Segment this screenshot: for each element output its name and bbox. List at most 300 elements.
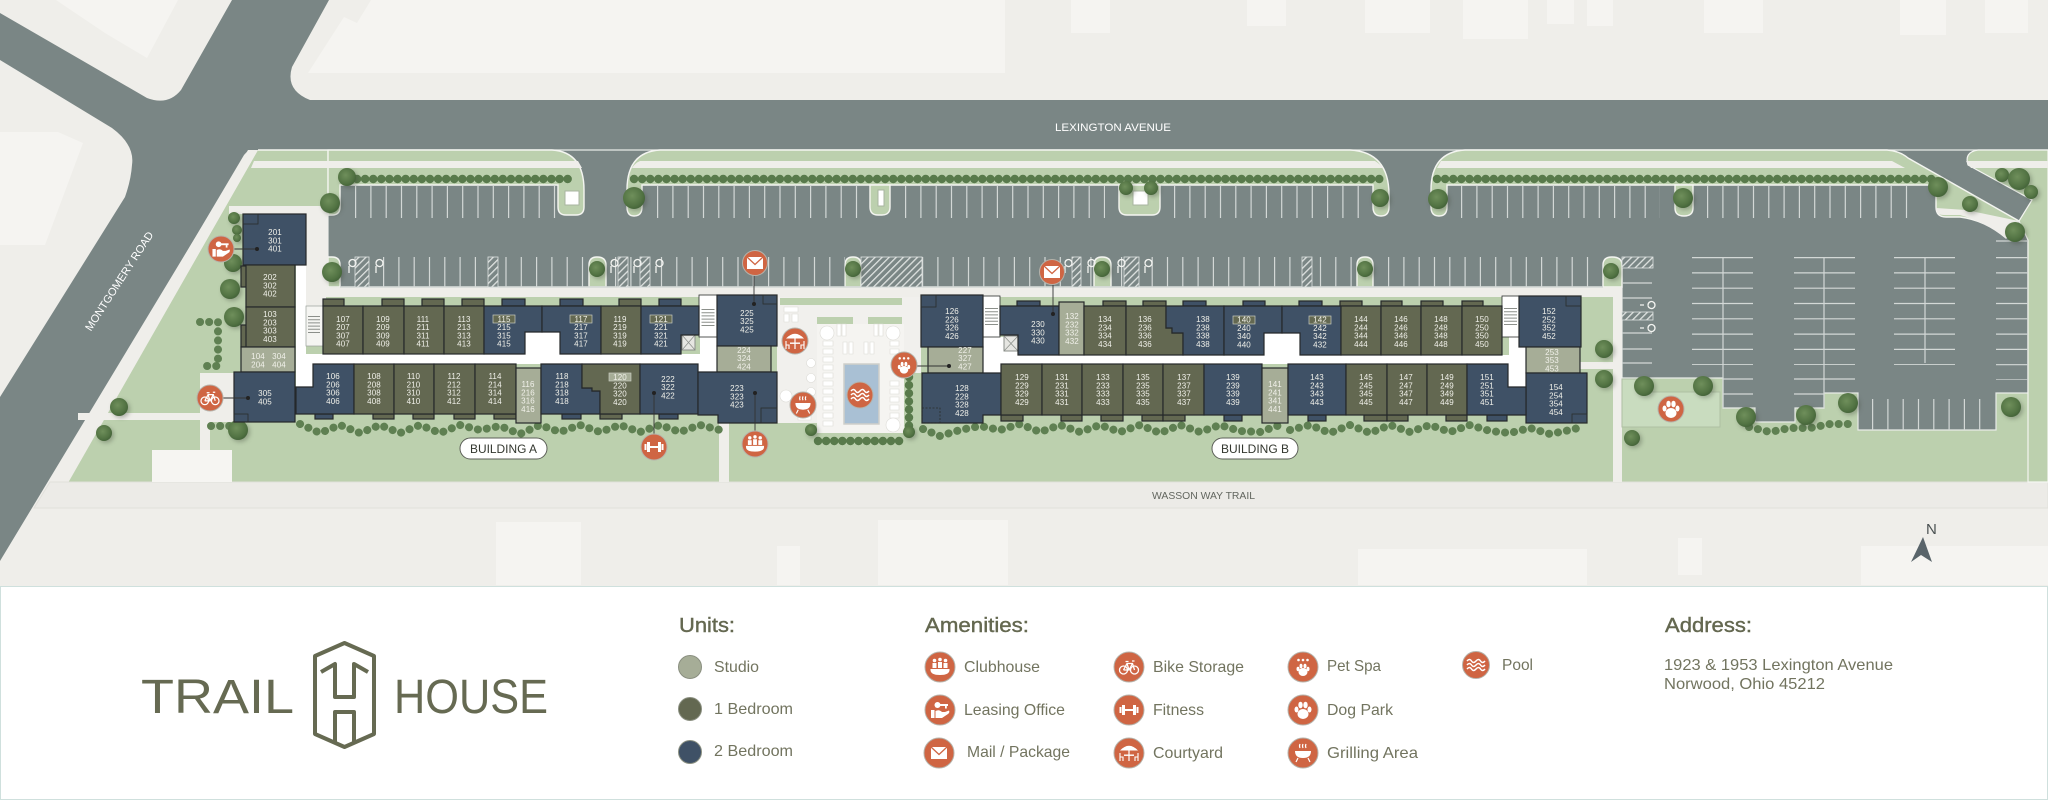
unit 253: 353 (1545, 356, 1559, 365)
unit 115: 115 (497, 315, 511, 324)
unit 138: 338 (1196, 332, 1210, 341)
unit 224: 324 (737, 354, 751, 363)
unit 201: 401 (268, 245, 282, 254)
unit 115: 415 (497, 340, 511, 349)
unit 139: 139 (1226, 373, 1240, 382)
unit 116: 316 (521, 397, 535, 406)
dog park lawn (1622, 379, 1720, 427)
unit 227: 227 (958, 346, 972, 355)
unit 107: 307 (336, 331, 350, 340)
building A (234, 214, 777, 423)
unit 146: 246 (1394, 323, 1408, 332)
address: Norwood, Ohio 45212 (1664, 676, 1825, 693)
unit 112: 312 (447, 389, 461, 398)
unit 115 (484, 299, 542, 354)
units legend (678, 615, 793, 764)
unit 230: 230 (1031, 320, 1045, 329)
loungers (780, 307, 900, 432)
unit 139 (1204, 364, 1262, 421)
unit 142: 432 (1313, 340, 1327, 349)
unit 137: 437 (1177, 398, 1191, 407)
unit 107: 107 (336, 315, 350, 324)
unit 135: 335 (1136, 390, 1150, 399)
unit 103: 403 (263, 335, 277, 344)
pool: Pool (1502, 657, 1533, 674)
unit 111 (404, 299, 444, 354)
unit 148 (1421, 301, 1462, 355)
unit 114: 114 (488, 372, 502, 381)
unit 149: 249 (1440, 381, 1454, 390)
address (1664, 615, 1893, 693)
unit 131 (1042, 364, 1082, 421)
unit 140: 240 (1237, 324, 1251, 333)
unit 132 (1059, 302, 1084, 355)
unit 135: 135 (1136, 373, 1150, 382)
unit 227: 427 (958, 362, 972, 371)
unit 109: 109 (376, 315, 390, 324)
unit 143: 143 (1310, 373, 1324, 382)
unit 136: 436 (1138, 340, 1152, 349)
unit 106: 106 (326, 372, 340, 381)
logo (141, 643, 548, 747)
unit 148: 348 (1434, 332, 1448, 341)
unit 129: 129 (1015, 373, 1029, 382)
unit 140: 440 (1237, 340, 1251, 349)
unit 114: 314 (488, 389, 502, 398)
unit 103: 303 (263, 327, 277, 336)
unit 128: 428 (955, 409, 969, 418)
unit 201: 201 (268, 228, 282, 237)
unit 202 (241, 265, 295, 307)
unit 135: 435 (1136, 398, 1150, 407)
unit 137: 237 (1177, 381, 1191, 390)
unit 129: 329 (1015, 390, 1029, 399)
unit 151: 351 (1480, 390, 1494, 399)
legend panel (0, 586, 2048, 800)
unit 107: 407 (336, 340, 350, 349)
label: Lexington Avenue: LEXINGTON AVENUE (1055, 122, 1171, 134)
unit 143: 243 (1310, 381, 1324, 390)
unit 129: 429 (1015, 398, 1029, 407)
label: Building B (1212, 438, 1298, 459)
unit 131: 431 (1055, 398, 1069, 407)
unit 121 (641, 299, 699, 354)
unit 116: 216 (521, 388, 535, 397)
unit 119 (601, 299, 641, 354)
unit 143: 343 (1310, 390, 1324, 399)
unit 119: 319 (613, 331, 627, 340)
unit 108 (354, 364, 394, 419)
unit 111: 111 (417, 315, 429, 324)
unit 253: 253 (1545, 348, 1559, 357)
unit 134: 134 (1098, 315, 1112, 324)
unit 145: 145 (1359, 373, 1373, 382)
unit 133: 333 (1096, 390, 1110, 399)
map icon: bike storage (197, 385, 250, 411)
mail and package (924, 738, 1070, 768)
unit 104: 204 (251, 360, 265, 369)
unit 114: 414 (488, 397, 502, 406)
roads (0, 0, 2048, 561)
unit 223: 323 (730, 392, 744, 401)
unit 139: 239 (1226, 381, 1240, 390)
unit 121: 121 (654, 315, 668, 324)
unit 119: 119 (613, 315, 627, 324)
unit 142 (1282, 301, 1341, 355)
unit 121: 321 (654, 331, 668, 340)
unit 133 (1082, 364, 1123, 421)
unit 202: 302 (263, 281, 277, 290)
unit 150: 150 (1475, 315, 1489, 324)
unit 225 (717, 295, 777, 346)
unit 106 (296, 364, 354, 419)
unit 253 (1526, 347, 1580, 373)
pet spa: Pet Spa (1327, 658, 1381, 675)
unit 118: 118 (555, 372, 569, 381)
map icon: pool (847, 382, 873, 408)
trees (96, 168, 2038, 446)
unit 110: 410 (407, 397, 421, 406)
address: Address: (1665, 615, 1752, 637)
grilling area (1288, 738, 1418, 768)
unit 222: 222 (661, 375, 675, 384)
unit 151: 251 (1480, 381, 1494, 390)
unit 106: 306 (326, 389, 340, 398)
bike storage (1114, 652, 1244, 682)
unit 134: 434 (1098, 340, 1112, 349)
unit 113: 413 (457, 340, 471, 349)
unit 144 (1340, 301, 1381, 355)
unit 227: 327 (958, 354, 972, 363)
unit 230: 330 (1031, 328, 1045, 337)
unit 117: 217 (574, 323, 588, 332)
map icon: courtyard (782, 328, 808, 354)
unit 111: 311 (416, 331, 430, 340)
unit 144: 444 (1354, 340, 1368, 349)
unit 142: 242 (1313, 324, 1327, 333)
corridors and stairs B (983, 296, 1526, 387)
map icon: leasing office (208, 236, 259, 262)
unit 126: 426 (945, 332, 959, 341)
unit 201: 301 (268, 236, 282, 245)
unit 115: 315 (497, 331, 511, 340)
unit 150: 350 (1475, 332, 1489, 341)
unit 113: 113 (457, 315, 471, 324)
map icon: fitness (641, 391, 667, 460)
label: Montgomery Road: MONTGOMERY ROAD (83, 230, 156, 333)
unit 154: 354 (1549, 400, 1563, 409)
unit 107 (323, 299, 363, 354)
unit 112: 412 (447, 397, 461, 406)
unit 129: 229 (1015, 381, 1029, 390)
unit 117: 317 (574, 331, 588, 340)
unit 109: 209 (376, 323, 390, 332)
unit 108: 208 (367, 380, 381, 389)
amenities legend: Amenities: (925, 615, 1029, 637)
unit 109: 309 (376, 331, 390, 340)
map background (0, 0, 2048, 586)
unit 223: 223 (730, 384, 744, 393)
unit 108: 308 (367, 389, 381, 398)
unit 103: 103 (263, 310, 277, 319)
unit 113 (444, 299, 484, 354)
unit 144: 244 (1354, 323, 1368, 332)
unit 151: 151 (1480, 373, 1494, 382)
unit 253: 453 (1545, 364, 1559, 373)
map icon: clubhouse (742, 391, 768, 457)
unit 126 (921, 295, 983, 347)
unit 145 (1346, 364, 1387, 421)
unit 135: 235 (1136, 381, 1150, 390)
site lawn (68, 150, 2048, 482)
mail and package: Mail / Package (967, 744, 1070, 761)
unit 154: 254 (1549, 391, 1563, 400)
unit 222: 422 (661, 391, 675, 400)
unit 148: 248 (1434, 323, 1448, 332)
unit 121: 221 (654, 323, 668, 332)
parking lot asphalt (328, 150, 2048, 430)
unit 113: 313 (457, 331, 471, 340)
unit 201 (243, 214, 306, 265)
unit 118: 218 (555, 380, 569, 389)
unit 141: 241 (1268, 388, 1282, 397)
map icon: pet spa (891, 352, 951, 378)
unit 202: 402 (263, 290, 277, 299)
unit 149: 449 (1440, 398, 1454, 407)
unit 136: 336 (1138, 332, 1152, 341)
unit 137 (1163, 364, 1204, 421)
clubhouse: Clubhouse (964, 659, 1040, 676)
unit 121: 421 (654, 340, 668, 349)
unit 132: 232 (1065, 320, 1079, 329)
unit 136: 136 (1138, 315, 1152, 324)
unit 147: 447 (1399, 398, 1413, 407)
unit 139: 339 (1226, 390, 1240, 399)
fitness (1114, 695, 1204, 725)
label: Building B: BUILDING B (1221, 442, 1289, 456)
side paths (78, 362, 1613, 482)
map icon: mail B (1040, 260, 1064, 316)
unit 152: 352 (1542, 324, 1556, 333)
unit 120: 420 (613, 398, 627, 407)
accessible stall marks (349, 260, 1655, 332)
unit 149 (1427, 364, 1467, 421)
unit 114: 214 (488, 380, 502, 389)
unit 128: 128 (955, 384, 969, 393)
unit 114 (475, 364, 516, 419)
address: 1923 & 1953 Lexington Avenue (1664, 657, 1893, 674)
unit 126: 326 (945, 324, 959, 333)
unit 142: 342 (1313, 332, 1327, 341)
unit 146: 346 (1394, 332, 1408, 341)
unit 134 (1084, 301, 1126, 355)
dog park: Dog Park (1327, 702, 1394, 719)
unit 144: 344 (1354, 332, 1368, 341)
unit 103 (241, 307, 295, 347)
unit 305: 305 (258, 389, 272, 398)
unit 305: 405 (258, 398, 272, 406)
units legend: 1 Bedroom (714, 701, 793, 718)
unit 118 (541, 364, 600, 419)
unit 152 (1519, 296, 1581, 347)
islands (251, 150, 2048, 482)
unit 134: 234 (1098, 323, 1112, 332)
unit 154: 154 (1549, 383, 1563, 392)
unit 140: 340 (1237, 332, 1251, 341)
unit 138: 238 (1196, 323, 1210, 332)
unit 144: 144 (1354, 315, 1368, 324)
unit 136 (1126, 301, 1183, 355)
unit 106: 406 (326, 397, 340, 406)
unit 148: 148 (1434, 315, 1448, 324)
courtyard: Courtyard (1153, 745, 1223, 762)
unit 152: 152 (1542, 307, 1556, 316)
unit 117: 417 (574, 340, 588, 349)
unit 133: 233 (1096, 381, 1110, 390)
unit 131: 231 (1055, 381, 1069, 390)
unit 132: 332 (1065, 329, 1079, 338)
unit 117: 117 (574, 315, 588, 324)
unit 147: 347 (1399, 390, 1413, 399)
unit 152: 252 (1542, 315, 1556, 324)
unit 132: 132 (1065, 312, 1079, 321)
clubhouse (925, 652, 1040, 682)
unit 222: 322 (661, 383, 675, 392)
unit 225: 425 (740, 325, 754, 334)
unit 107: 207 (336, 323, 350, 332)
logo: TRAIL (141, 671, 294, 724)
unit 141 (1262, 368, 1288, 423)
pet spa (1288, 652, 1381, 682)
unit 137: 137 (1177, 373, 1191, 382)
leasing office: Leasing Office (964, 702, 1065, 719)
unit 111: 411 (416, 340, 430, 349)
courtyard and pool (777, 297, 921, 433)
unit 112: 212 (447, 380, 461, 389)
unit 150: 250 (1475, 323, 1489, 332)
pool (1462, 652, 1533, 678)
unit 140: 140 (1237, 316, 1251, 324)
unit 154 (1526, 373, 1587, 423)
unit 224: 224 (737, 346, 751, 355)
unit 225: 225 (740, 309, 754, 318)
label: Building A: BUILDING A (470, 442, 537, 456)
map icon: dog park (1658, 396, 1684, 422)
unit 106: 206 (326, 380, 340, 389)
unit 103: 203 (263, 318, 277, 327)
pool water (844, 364, 879, 424)
unit 145: 245 (1359, 381, 1373, 390)
logo: HOUSE (394, 671, 548, 724)
label: Building A (460, 438, 547, 459)
unit 146: 446 (1394, 340, 1408, 349)
unit 119: 219 (613, 323, 627, 332)
unit 133: 133 (1096, 373, 1110, 382)
unit 147 (1387, 364, 1427, 421)
unit 119: 419 (613, 340, 627, 349)
unit 227 (928, 346, 983, 373)
building B (921, 295, 1587, 423)
units legend: Studio (714, 659, 759, 676)
courtyard (1114, 738, 1223, 768)
bike storage: Bike Storage (1153, 659, 1244, 676)
unit 230 (1000, 301, 1059, 355)
corridors and stairs A (296, 265, 717, 387)
unit 126: 226 (945, 315, 959, 324)
fitness: Fitness (1153, 702, 1204, 719)
unit 120: 220 (613, 381, 627, 390)
parking stall lines (340, 202, 2028, 414)
unit 132: 432 (1065, 337, 1079, 346)
unit 136: 236 (1138, 323, 1152, 332)
unit 128: 328 (955, 401, 969, 410)
unit 138: 438 (1196, 340, 1210, 349)
units legend: 2 Bedroom (714, 743, 793, 760)
unit 140 (1224, 301, 1282, 355)
map icon: grilling area (790, 392, 816, 418)
unit 118: 418 (555, 397, 569, 406)
unit 120: 120 (613, 373, 627, 382)
unit 118: 318 (555, 389, 569, 398)
unit 120 (582, 364, 640, 419)
unit 147: 247 (1399, 381, 1413, 390)
unit 149: 349 (1440, 390, 1454, 399)
sidewalks (229, 206, 1622, 482)
unit 141: 341 (1268, 397, 1282, 406)
unit 224 (717, 346, 771, 372)
unit 104: 304 (272, 352, 286, 361)
perimeter sidewalk (50, 150, 258, 483)
unit 116 (516, 368, 541, 423)
unit 141: 141 (1268, 380, 1282, 389)
unit 128: 228 (955, 392, 969, 401)
unit 104 (241, 347, 295, 372)
unit 110: 210 (407, 380, 421, 389)
unit 149: 149 (1440, 373, 1454, 382)
label: Wasson Way Trail: WASSON WAY TRAIL (1152, 490, 1255, 502)
unit 110: 310 (407, 389, 421, 398)
unit 131: 331 (1055, 390, 1069, 399)
unit 143 (1288, 364, 1346, 421)
units legend: Units: (679, 615, 735, 637)
unit 135 (1123, 364, 1163, 421)
unit 111: 211 (416, 323, 430, 332)
unit 224: 424 (737, 362, 751, 371)
unit 110: 110 (407, 372, 420, 381)
unit 138: 138 (1196, 315, 1210, 324)
unit 108: 408 (367, 397, 381, 406)
leasing office (925, 695, 1065, 725)
unit 142: 142 (1313, 316, 1327, 324)
dog park (1288, 695, 1394, 725)
unit 150: 450 (1475, 340, 1489, 349)
unit 202: 202 (263, 273, 277, 282)
unit 143: 443 (1310, 398, 1324, 407)
unit 225: 325 (740, 317, 754, 326)
unit 145: 445 (1359, 398, 1373, 407)
unit 147: 147 (1399, 373, 1413, 382)
unit 305 (234, 372, 295, 422)
unit 151: 451 (1480, 398, 1494, 407)
unit 151 (1467, 364, 1526, 421)
unit 129 (1001, 364, 1042, 421)
unit 222 (640, 364, 698, 419)
unit 126: 126 (945, 307, 959, 316)
unit 150 (1462, 301, 1502, 355)
map icon: mail A (742, 250, 768, 306)
unit 108: 108 (367, 372, 381, 381)
unit 141: 441 (1268, 405, 1282, 414)
